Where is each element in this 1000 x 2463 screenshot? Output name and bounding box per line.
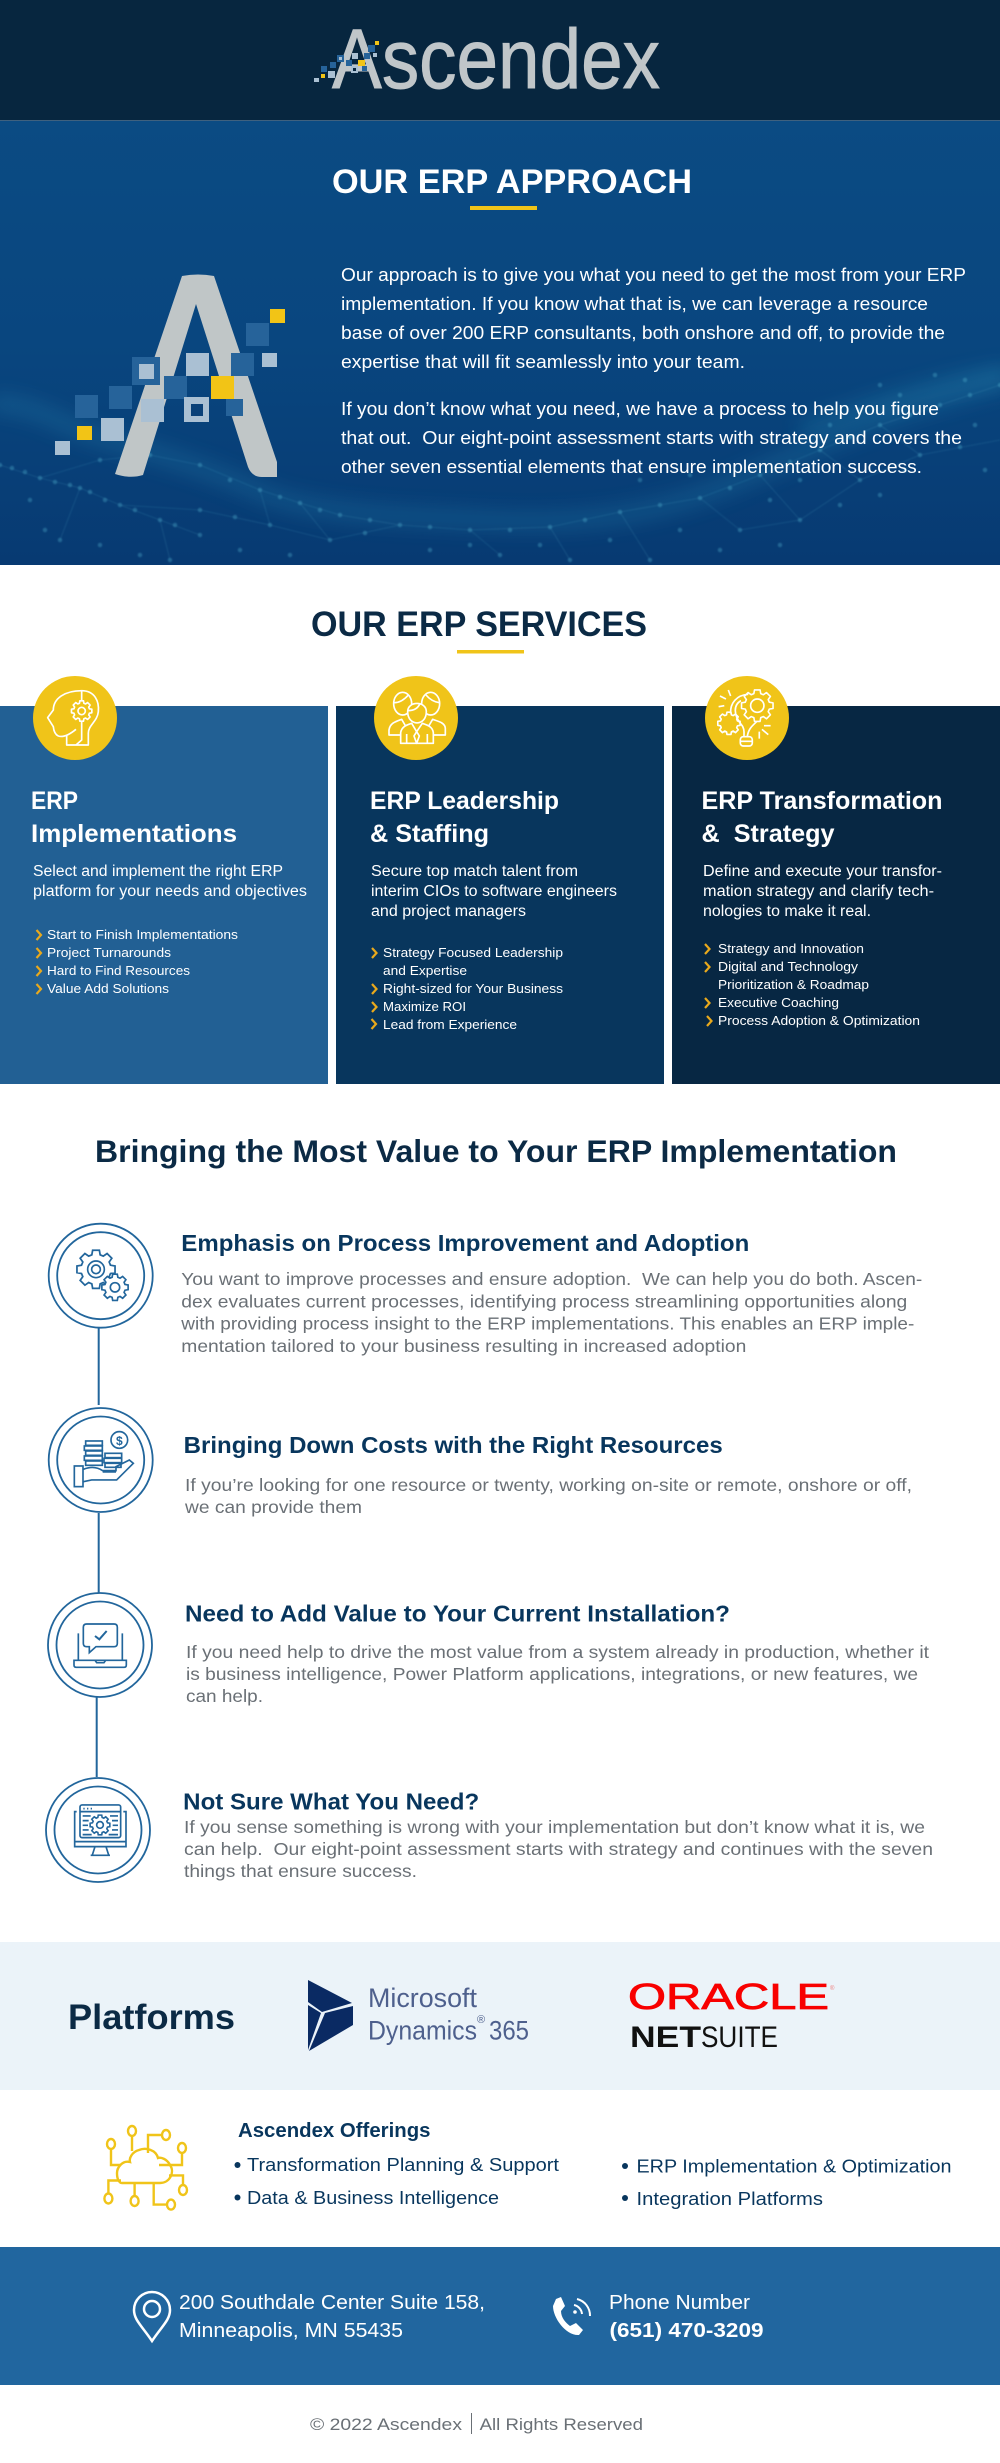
network wave background (0, 372, 1000, 560)
panel: our ERP approach hero (0, 121, 1000, 565)
item body: is business intelligence, Power Platform applications, integrations, or new features, we (186, 1664, 918, 1684)
icon: gears in rings (49, 1224, 153, 1328)
icon: location pin (134, 2292, 170, 2341)
card description (33, 863, 307, 900)
icon: cloud network (104, 2126, 187, 2210)
item body: can help. Our eight-point assessment starts with strategy and continues with the seven (184, 1839, 933, 1859)
item body: can help. (186, 1686, 263, 1706)
value item: not sure what you need (46, 1778, 933, 1882)
icon: team of people (374, 676, 458, 760)
heading: our ERP approach: OUR ERP APPROACH (332, 163, 692, 201)
logo: Microsoft Dynamics 365: Microsoft (368, 1983, 477, 2013)
card bullet list: Digital and Technology (718, 959, 859, 974)
timeline connectors (97, 1327, 99, 1777)
card heading: ERP (31, 787, 78, 815)
item body: You want to improve processes and ensure adoption. We can help you do both. Ascen- (181, 1269, 922, 1289)
heading: our ERP services: OUR ERP SERVICES (311, 605, 647, 644)
item heading: Not Sure What You Need? (183, 1789, 479, 1815)
card description: and project managers (371, 903, 526, 920)
panel: ERP leadership and staffing (336, 676, 664, 1084)
copyright line: All Rights Reserved (480, 2415, 643, 2434)
card heading: & Staffing (370, 820, 489, 848)
card description: interim CIOs to software engineers (371, 883, 617, 900)
graphic: large A with squares (55, 274, 285, 477)
card bullet list: Process Adoption & Optimization (718, 1013, 920, 1028)
card description (703, 863, 942, 920)
card heading (702, 787, 942, 848)
item body: mentation tailored to your business resulting in increased adoption (181, 1336, 746, 1356)
card heading (370, 787, 559, 848)
logo: Ascendex: Ascendex (332, 12, 660, 106)
offerings list: Integration Platforms (636, 2188, 823, 2209)
value item: process improvement (49, 1224, 922, 1356)
text: approach paragraphs: expertise that will fit seamlessly into your team. (341, 352, 745, 372)
item body (184, 1475, 912, 1517)
card description: platform for your needs and objectives (33, 883, 307, 900)
card heading (31, 787, 237, 848)
offerings heading: Ascendex Offerings (238, 2120, 430, 2142)
text: approach paragraphs: implementation. If you know what that is, we can leverage a resource (341, 294, 928, 314)
card description: mation strategy and clarify tech- (703, 883, 934, 900)
text: approach paragraphs: base of over 200 ERP consultants, both onshore and off, to provide the (341, 323, 945, 343)
panel: Ascendex offerings (104, 2120, 951, 2210)
card bullet list: Maximize ROI (383, 999, 466, 1014)
logo: Microsoft Dynamics 365: Dynamics (368, 2016, 477, 2046)
card heading: & Strategy (702, 820, 835, 848)
offerings list (234, 2154, 952, 2209)
icon: monitor with gear (46, 1778, 150, 1882)
text: approach paragraphs: Our approach is to give you what you need to get the most from your ERP (341, 265, 966, 285)
card bullet list: Project Turnarounds (47, 945, 172, 960)
card bullet list: and Expertise (383, 963, 467, 978)
card bullet list (372, 945, 564, 1032)
phone text (609, 2291, 764, 2342)
logo: Oracle NetSuite: SUITE (701, 2021, 778, 2054)
logo: Oracle NetSuite: NET (630, 2021, 701, 2054)
icon: hand with coins: $ (116, 1434, 123, 1448)
logo: Microsoft Dynamics 365 (308, 1980, 529, 2051)
item body: things that ensure success. (184, 1861, 417, 1881)
copyright line: © 2022 Ascendex (310, 2415, 463, 2434)
card bullet list: Value Add Solutions (47, 981, 170, 996)
icon: lightbulb with gears (705, 676, 789, 760)
text: approach paragraphs: that out. Our eight-point assessment starts with strategy and covers the (341, 428, 962, 448)
panel: ERP transformation and strategy (672, 676, 1000, 1084)
card bullet list: Strategy Focused Leadership (383, 945, 563, 960)
logo: Oracle NetSuite (628, 1976, 835, 2054)
icon: laptop with chat check (48, 1593, 152, 1697)
item body: we can provide them (184, 1497, 362, 1517)
value item: add value to installation (48, 1593, 929, 1706)
card description: nologies to make it real. (703, 903, 871, 920)
item body: If you’re looking for one resource or twenty, working on-site or remote, onshore or off, (185, 1475, 912, 1495)
text: approach paragraphs: other seven essential elements that ensure implementation success. (341, 457, 922, 477)
icon: hand with coins (49, 1408, 153, 1512)
card bullet list: Start to Finish Implementations (47, 927, 239, 942)
item body (180, 1269, 922, 1356)
card bullet list: Lead from Experience (383, 1017, 517, 1032)
offerings list: ERP Implementation & Optimization (636, 2156, 952, 2176)
card heading: ERP Leadership (370, 787, 559, 815)
logo: Microsoft Dynamics 365: ® (477, 2014, 485, 2026)
item body: If you need help to drive the most value from a system already in production, whether it (186, 1642, 929, 1662)
item body (184, 1817, 933, 1881)
card heading: ERP Transformation (702, 787, 942, 815)
phone text: Phone Number (609, 2291, 750, 2314)
heading: platforms: Platforms (68, 1998, 235, 2037)
item heading: Need to Add Value to Your Current Installation? (185, 1601, 730, 1627)
address: Minneapolis, MN 55435 (179, 2319, 403, 2342)
logo: Oracle NetSuite: ORACLE (628, 1976, 829, 2017)
panel: platforms (0, 1942, 1000, 2090)
panel: ERP implementations (0, 676, 328, 1084)
item body: dex evaluates current processes, identifying process streamlining opportunities along (181, 1291, 907, 1311)
heading: bringing the most value: Bringing the Most Value to Your ERP Implementation (95, 1133, 897, 1169)
card description: Define and execute your transfor- (703, 863, 942, 880)
card description: Select and implement the right ERP (33, 863, 283, 880)
address: 200 Southdale Center Suite 158, (179, 2291, 485, 2314)
item body: with providing process insight to the ERP implementations. This enables an ERP imple- (180, 1314, 914, 1334)
icon: phone (553, 2297, 590, 2335)
icon: head with gear (33, 676, 117, 760)
card description (371, 863, 617, 920)
card bullet list: Executive Coaching (718, 995, 839, 1010)
panel: contact band (0, 2247, 1000, 2385)
card bullet list: Strategy and Innovation (718, 941, 864, 956)
card bullet list: Prioritization & Roadmap (718, 977, 869, 992)
logo: Microsoft Dynamics 365: 365 (489, 2016, 529, 2046)
card heading: Implementations (31, 820, 237, 848)
item heading: Bringing Down Costs with the Right Resources (184, 1432, 723, 1458)
card bullet list (36, 927, 239, 996)
heading underline (470, 206, 537, 210)
card bullet list: Hard to Find Resources (47, 963, 191, 978)
item body: If you sense something is wrong with your implementation but don’t know what it is, we (184, 1817, 925, 1837)
text: approach paragraphs: If you don’t know what you need, we have a process to help you figure (341, 399, 939, 419)
item heading: Emphasis on Process Improvement and Adoption (181, 1230, 749, 1256)
header band (0, 0, 1000, 121)
text: approach paragraphs (341, 265, 966, 477)
card bullet list: Right-sized for Your Business (383, 981, 564, 996)
phone text: (651) 470-3209 (610, 2319, 764, 2342)
item body (186, 1642, 929, 1706)
logo: Oracle NetSuite: ® (830, 1985, 835, 1992)
address (179, 2291, 485, 2342)
value item: bringing down costs (49, 1408, 912, 1517)
card description: Secure top match talent from (371, 863, 578, 880)
offerings list: Transformation Planning & Support (247, 2154, 559, 2175)
card bullet list (705, 941, 920, 1028)
offerings list: Data & Business Intelligence (247, 2187, 499, 2208)
copyright line (310, 2413, 643, 2434)
